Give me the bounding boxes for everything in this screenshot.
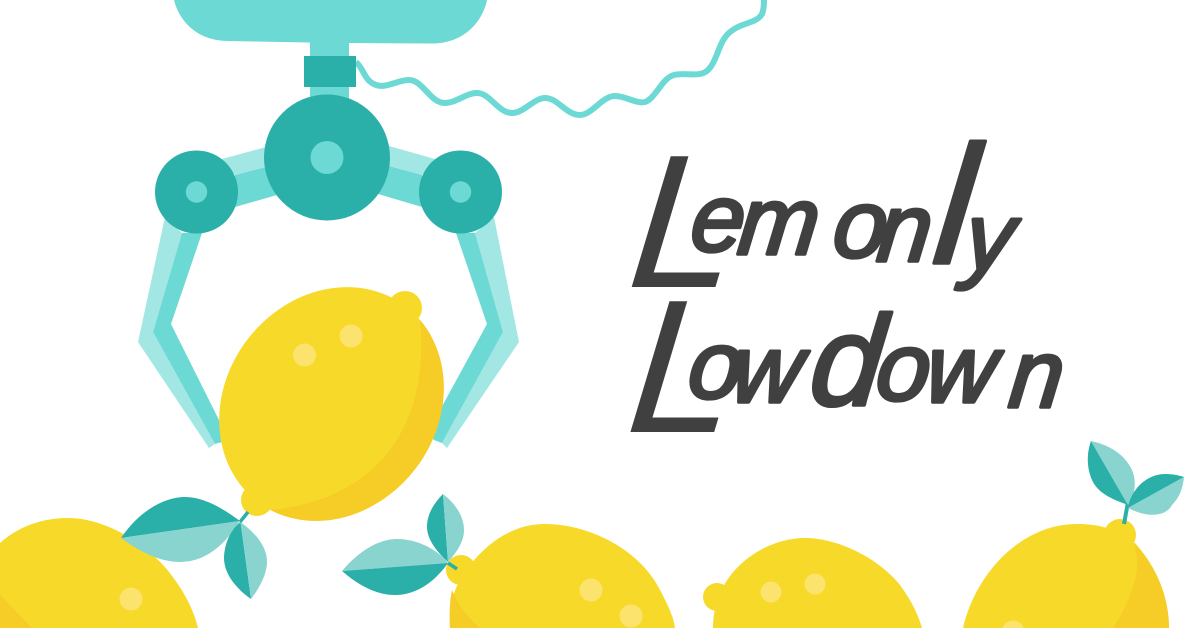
leaves on right lemon [1088, 441, 1184, 524]
lemon bottom right [963, 519, 1169, 628]
collar [304, 56, 356, 87]
lemon bottom centre right [703, 538, 922, 628]
title line one: L [622, 116, 749, 328]
title line one: l [928, 110, 989, 299]
title line two: L [620, 261, 748, 473]
robot claw [138, 0, 764, 448]
title [620, 110, 1076, 473]
leaves on centre left lemon [342, 494, 464, 595]
title line one: y [954, 184, 1024, 291]
title line two: own [871, 314, 1070, 428]
title line one: emon [685, 165, 939, 282]
right joint [419, 150, 502, 234]
lemon bottom centre left [446, 524, 675, 628]
wire [356, 0, 764, 115]
right arm [378, 146, 519, 448]
held lemon [219, 287, 444, 521]
title line two: ow [684, 312, 814, 423]
claw housing [174, 0, 487, 100]
leaves on held lemon [121, 497, 267, 599]
center joint [264, 94, 390, 220]
left arm [138, 147, 277, 448]
left joint [155, 150, 238, 234]
title line two: d [804, 290, 894, 433]
lemon bottom left [0, 518, 198, 628]
